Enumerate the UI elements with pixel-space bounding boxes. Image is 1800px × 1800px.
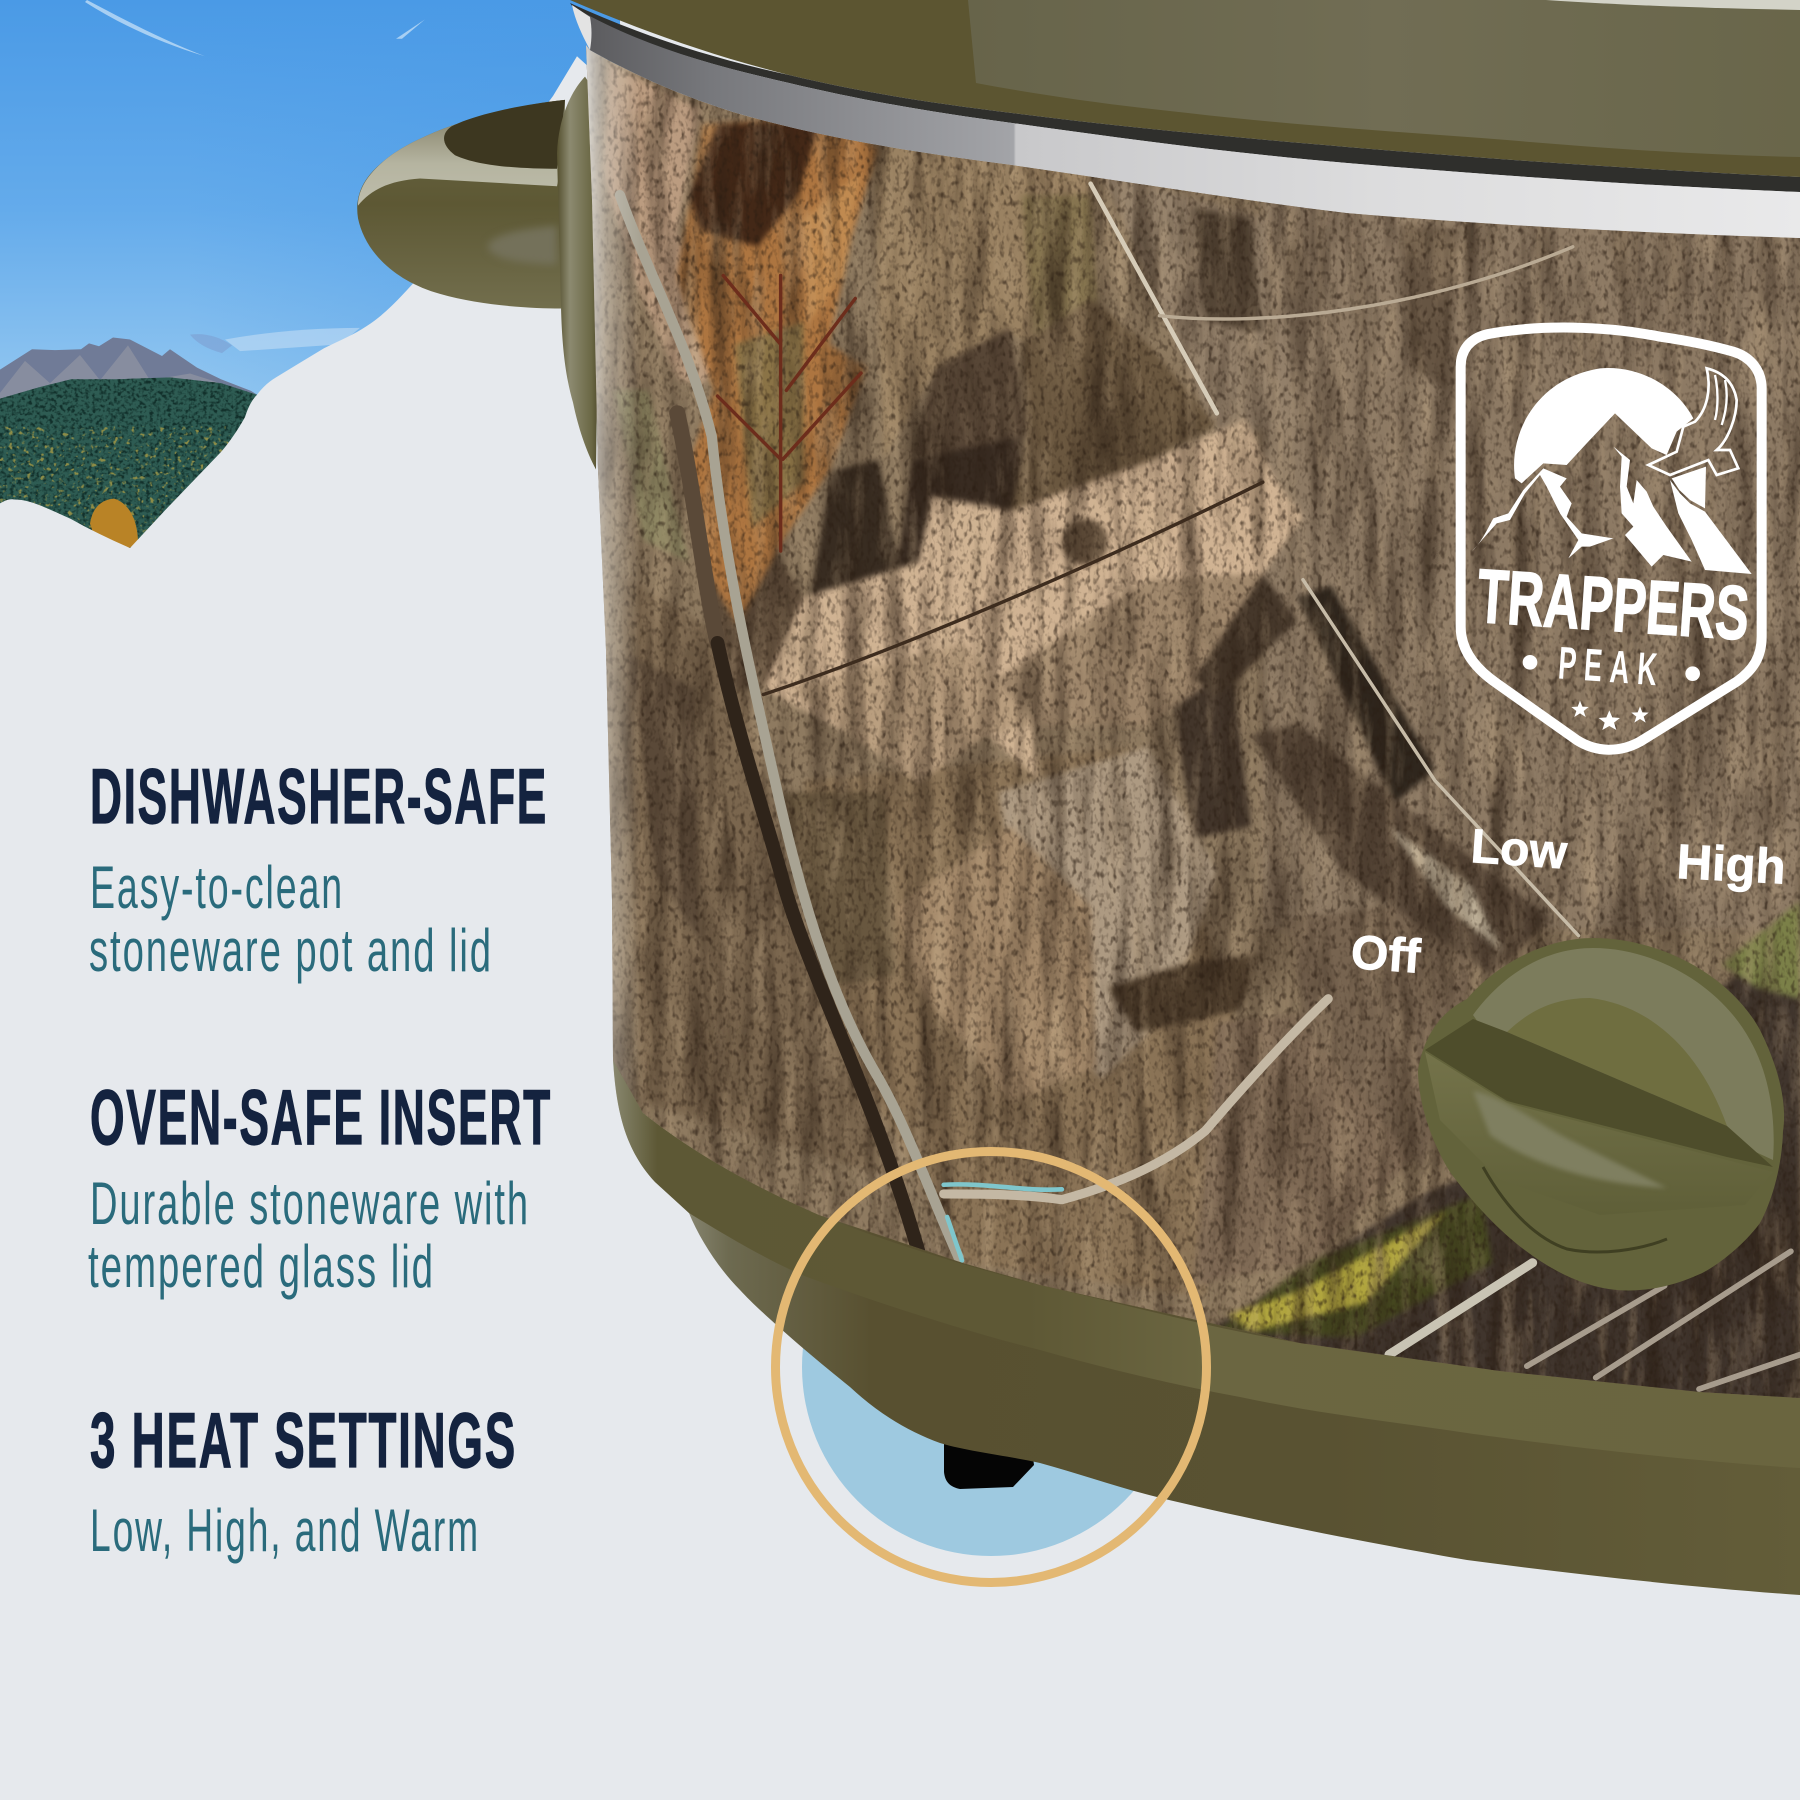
dark seal line	[570, 3, 1800, 192]
knob lower gloss	[1425, 1052, 1773, 1215]
feature: oven-safe insert: tempered glass lid	[88, 1233, 435, 1300]
bottom-right log	[1212, 972, 1800, 1398]
eagle	[1648, 368, 1738, 475]
handle opening	[444, 100, 565, 169]
feature text list	[88, 752, 552, 1564]
callout ring	[776, 1152, 1206, 1582]
handle loop	[357, 100, 565, 308]
orange leaf	[677, 115, 878, 626]
sun and ridge	[1514, 368, 1693, 483]
camo pattern	[603, 63, 1800, 1412]
knob top dome	[1473, 948, 1774, 1160]
feature: oven-safe insert: OVEN-SAFE INSERT	[90, 1073, 552, 1161]
feature: dishwasher-safe: Easy-to-clean	[90, 854, 344, 921]
feature: heat settings	[90, 1396, 517, 1564]
feature: oven-safe insert	[88, 1073, 552, 1300]
knob lower arc	[1483, 1167, 1667, 1252]
pale oak leaf	[763, 419, 1303, 783]
knob indicator stripe	[1425, 1019, 1773, 1167]
label: off: Off	[1349, 926, 1423, 984]
lid light panel	[968, 0, 1800, 157]
knob	[1418, 938, 1784, 1290]
label: high: High	[1675, 835, 1787, 895]
glass edge highlight	[586, 45, 636, 1099]
three stars	[1571, 701, 1589, 717]
left pale leaf	[603, 63, 758, 385]
right slope	[1670, 480, 1752, 574]
handle mounting plate	[557, 77, 600, 469]
brand logo badge	[1461, 328, 1762, 750]
lid dome	[570, 0, 1800, 177]
brand sub name: PEAK	[1557, 636, 1667, 696]
side handle	[357, 77, 600, 469]
forested hill	[0, 377, 257, 548]
shield outline	[1461, 328, 1762, 750]
dark patches	[913, 327, 1027, 459]
bark streaks texture	[570, 30, 1800, 1410]
lower-left shadow	[629, 654, 700, 941]
branches and twigs	[620, 184, 1800, 1389]
mountain strokes	[1472, 468, 1613, 558]
lid	[570, 0, 1800, 238]
white mountain silhouette	[0, 56, 640, 1800]
feature: dishwasher-safe: stoneware pot and lid	[89, 917, 493, 984]
feature: dishwasher-safe: DISHWASHER-SAFE	[90, 752, 548, 840]
label: low: Low	[1469, 820, 1569, 880]
distant mountain	[0, 338, 262, 427]
camo body	[570, 30, 1800, 1412]
pot rubber foot	[944, 1440, 1034, 1489]
autumn tree	[90, 499, 138, 553]
knob body	[1418, 938, 1784, 1290]
pot bowl base	[613, 1060, 1800, 1595]
feature: oven-safe insert: Durable stoneware with	[90, 1170, 530, 1237]
steel band	[575, 8, 1800, 238]
blue callout disc	[802, 1178, 1180, 1556]
lid top highlight	[1546, 0, 1800, 10]
dial labels	[1349, 820, 1787, 984]
sky with mountains	[0, 0, 620, 600]
feature: heat settings: Low, High, and Warm	[90, 1497, 480, 1564]
feature: dishwasher-safe	[89, 752, 548, 984]
pot rim band	[613, 1058, 1800, 1468]
feature: heat settings: 3 HEAT SETTINGS	[90, 1396, 517, 1484]
handle highlight	[488, 226, 557, 265]
